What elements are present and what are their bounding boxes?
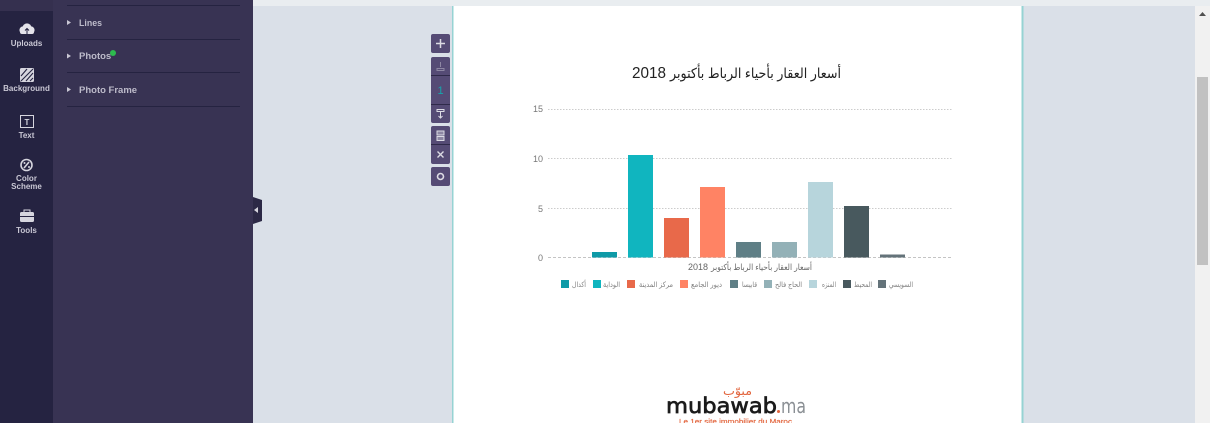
button group: duplicate and delete [431,126,450,164]
icon: tools [20,210,34,222]
icon: uploads [19,23,35,34]
bars [592,155,905,258]
panel collapse handle [253,197,262,224]
legend [561,279,913,289]
button: add [431,34,450,53]
x axis title: أسعار العقار بأحياء الرباط بأكتوبر [710,261,812,272]
legend: مركز المدينة [639,280,673,289]
list item: photos [67,50,116,62]
list item: photo frame: Photo Frame [79,85,137,96]
label: background: Background [3,84,50,93]
icon: text [20,116,34,128]
legend: المحيط [854,280,872,289]
top bar [253,0,1210,6]
logo: mubawab: مبوّب [723,384,752,399]
y axis labels: 0 [538,253,543,263]
label: uploads: Uploads [11,39,43,48]
title: أسعار العقار بأحياء الرباط بأكتوبر [669,63,841,82]
x axis title [688,261,812,272]
logo: mubawab: ma [781,394,806,418]
y axis labels: 15 [533,104,543,114]
legend: الوداية [603,280,620,289]
legend: قابيسا [742,280,757,289]
y axis labels: 5 [538,204,543,214]
scrollbar [1195,6,1210,423]
page toolbar [431,34,450,186]
icon: text: T [25,118,30,127]
list item: photos: Photos [79,51,111,62]
legend: المنزه [822,280,836,289]
button group: page order: 1 [437,85,444,97]
logo: mubawab: mubawab [666,394,777,418]
y axis labels: 10 [533,154,543,164]
label: color scheme: Color [16,174,37,183]
x axis title: 2018 [688,262,708,272]
logo: mubawab [666,384,806,423]
button group: page order [431,57,450,123]
title: 2018 [632,65,666,82]
legend: الحاج فالح [775,280,802,289]
icon: color scheme [21,160,32,170]
button: settings [431,167,450,186]
legend: السويسي [889,280,913,289]
panel: element list [53,0,253,423]
list item: lines [67,18,102,29]
grid lines [548,110,952,258]
list item: lines: Lines [79,18,102,29]
label: text: Text [19,131,35,140]
bar chart [533,104,952,289]
legend: ديور الجامع [691,280,722,289]
y axis labels [533,104,543,263]
label: tools: Tools [16,226,37,235]
legend: أكدال [572,279,586,289]
label: color scheme: Scheme [11,182,42,191]
panel: icon sidebar [0,0,53,423]
infographic page [452,6,1024,423]
icon: background [20,68,34,82]
title [632,63,841,82]
